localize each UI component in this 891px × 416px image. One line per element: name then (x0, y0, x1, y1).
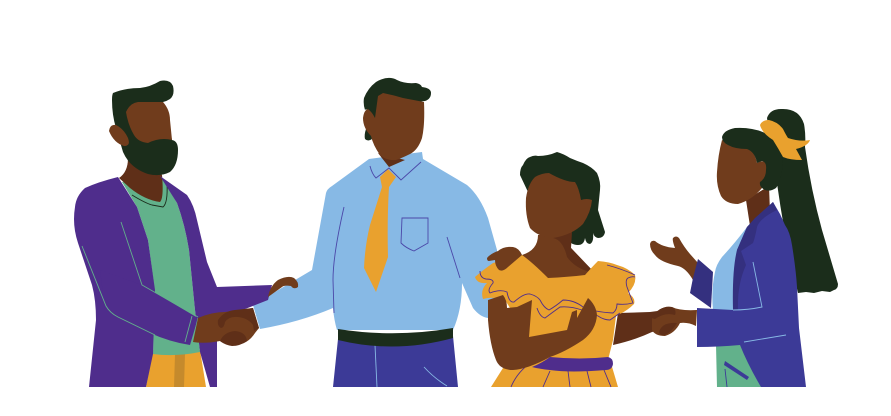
raised hand (650, 236, 698, 280)
waist sash (532, 357, 613, 372)
trouser seams (375, 345, 447, 387)
figure: woman in orange dress (475, 152, 697, 387)
green shirt (716, 342, 762, 387)
trousers (333, 336, 458, 387)
hair and beard silhouette (112, 81, 178, 175)
hand on shoulder (487, 247, 522, 271)
green t-shirt (122, 178, 200, 355)
right woman's hand (652, 307, 697, 336)
head (363, 93, 424, 160)
head hair (722, 128, 783, 191)
jacket seams (725, 262, 786, 387)
arm and handshake (193, 308, 259, 345)
ponytail (767, 109, 838, 293)
hair (520, 152, 605, 245)
handshake shadow (218, 308, 259, 331)
figure: bearded man in purple cardigan (74, 81, 298, 387)
light blue top (712, 227, 747, 312)
hair back tuft (365, 129, 372, 140)
lower finger shadow (220, 331, 247, 346)
cardigan right panel (160, 176, 272, 387)
face (126, 102, 172, 143)
pocket (724, 361, 749, 380)
trouser stripe (174, 354, 185, 387)
face (526, 173, 592, 238)
neck (746, 186, 770, 226)
near arm (488, 295, 597, 370)
figure: woman with ponytail (650, 109, 838, 387)
jacket (697, 202, 806, 387)
blue shirt (253, 152, 497, 330)
hair (364, 78, 431, 122)
ear (109, 125, 129, 146)
hair bow (760, 120, 810, 160)
cardigan sleeve (100, 270, 198, 345)
tie (364, 169, 396, 292)
sleeve seams (82, 222, 198, 344)
collar and pocket lines (333, 162, 460, 313)
partner thumb over sleeve (268, 277, 298, 297)
neck (119, 158, 163, 202)
purple cardigan (74, 177, 155, 387)
neck (522, 235, 592, 282)
far arm (613, 310, 665, 345)
figure: man in blue shirt (253, 78, 497, 387)
neck shade (553, 232, 592, 272)
neck (378, 153, 405, 167)
belt (338, 328, 453, 347)
dress bodice (525, 300, 618, 368)
dress ruffled collar (475, 255, 635, 340)
collar line (132, 183, 167, 207)
fist top shadow (651, 307, 676, 319)
face (717, 140, 767, 204)
skirt (491, 360, 618, 387)
trousers (146, 350, 206, 387)
fist finger shadow (659, 323, 677, 335)
jacket lapel shade (733, 202, 777, 310)
ruffle lines (480, 265, 635, 320)
skirt pleat lines (511, 360, 611, 387)
cuff (690, 259, 713, 308)
